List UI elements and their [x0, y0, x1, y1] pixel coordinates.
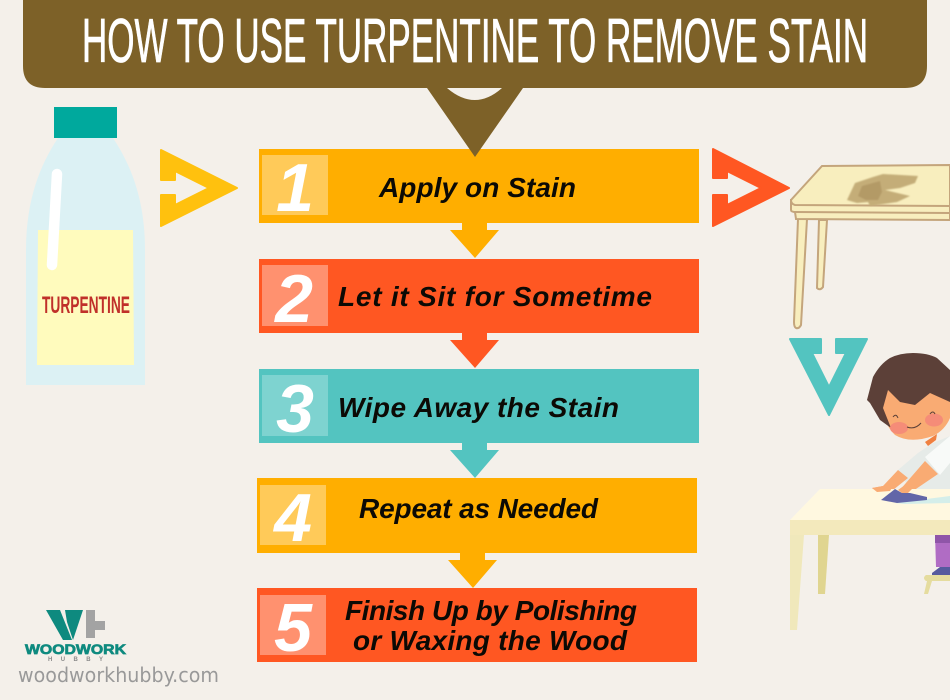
step 5 text [345, 595, 637, 656]
arrow: step 2 to step 3 [450, 333, 499, 368]
boy neck [925, 434, 937, 446]
arrow: step 4 to step 5 [448, 553, 497, 588]
wood stain [847, 174, 918, 206]
panel: step 4 [257, 478, 697, 556]
arrow: bottle to step 1 [161, 150, 237, 226]
panel: step 1 [259, 149, 699, 226]
step 4 number: 4 [272, 480, 312, 556]
bottle label: TURPENTINE [42, 292, 130, 319]
logo: Woodwork Hubby [25, 610, 126, 663]
step 2 number: 2 [273, 261, 313, 337]
step 1 number: 1 [276, 150, 314, 226]
step 4 text: Repeat as Needed [359, 493, 599, 524]
boy shirt [898, 436, 950, 492]
arrow: step 3 to step 4 [450, 443, 499, 478]
table legs and apron [790, 520, 950, 535]
step 1 text: Apply on Stain [378, 172, 576, 203]
boy face [880, 385, 950, 440]
boy left hand [872, 483, 895, 492]
arrow: step 1 to step 2 [450, 223, 499, 258]
step 3 number: 3 [276, 371, 314, 447]
banner pointer [427, 88, 523, 157]
icon: stained table [791, 165, 950, 328]
title banner [23, 0, 927, 88]
step 5 text: Finish Up by Polishing [345, 595, 637, 626]
wet streak [895, 496, 950, 504]
website url: woodworkhubby.com [18, 663, 219, 687]
icon: turpentine bottle [26, 107, 145, 385]
step 5 number: 5 [274, 590, 313, 666]
step 5 text: or Waxing the Wood [353, 625, 628, 656]
logo mark H [86, 610, 105, 638]
step 2 text: Let it Sit for Sometime [338, 281, 652, 312]
panel: step 2 [259, 259, 699, 337]
logo name: WOODWORK [25, 641, 126, 657]
table surface [790, 489, 950, 520]
arrow: stained table to wiping boy [790, 339, 867, 415]
boy arms [872, 470, 908, 492]
cleaning cloth [881, 489, 927, 503]
arrow: step 1 to stained table [713, 149, 789, 226]
boy face details [890, 422, 908, 434]
boy right hand [898, 480, 915, 493]
panel: step 5 [257, 588, 697, 666]
boy legs [935, 534, 950, 567]
boy hair [867, 353, 950, 428]
logo mark W [46, 610, 83, 640]
icon: boy wiping table [790, 353, 950, 630]
step 3 text: Wipe Away the Stain [338, 392, 619, 423]
panel: step 3 [259, 369, 699, 447]
logo subtitle: HUBBY [48, 657, 103, 663]
